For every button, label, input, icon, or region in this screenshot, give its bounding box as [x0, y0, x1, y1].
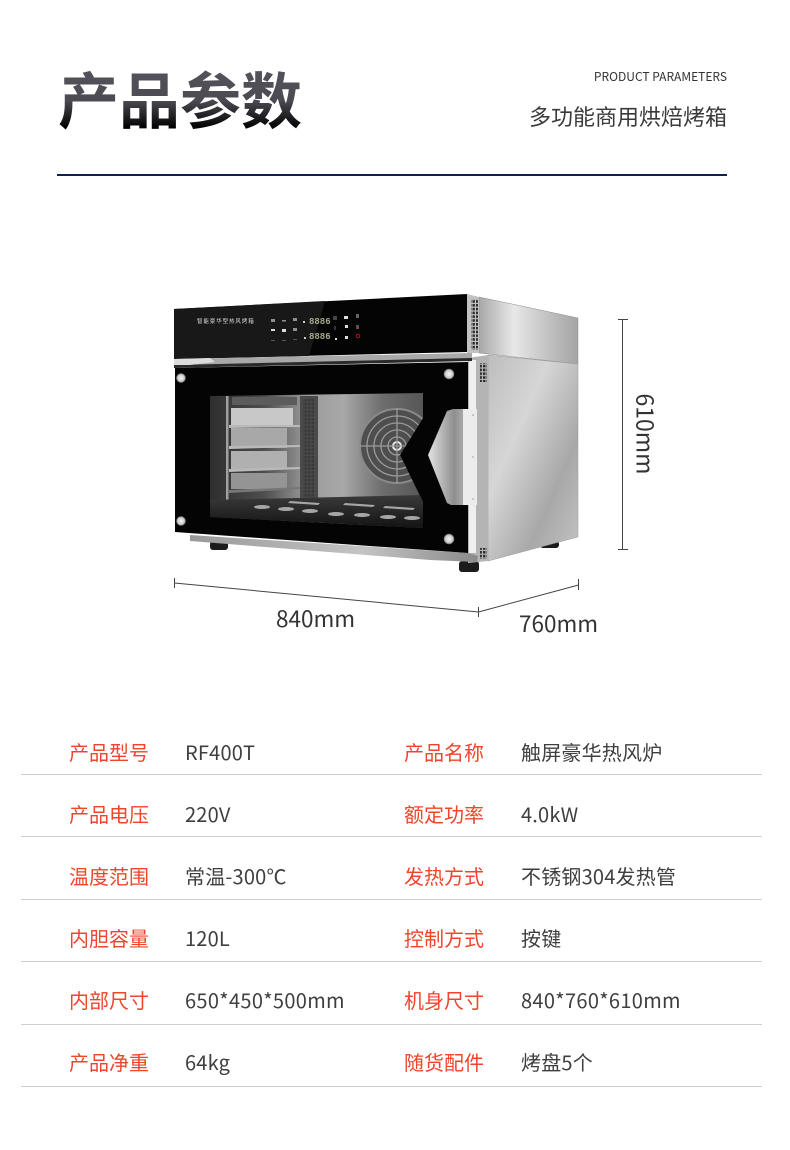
row: dimensions: 650*450*500mm — [185, 985, 345, 1014]
column vents — [480, 363, 487, 559]
row: capacity and control: 控制方式 — [404, 923, 484, 952]
subtitle: 多功能商用烘焙烤箱 — [529, 100, 727, 132]
row: temperature and heating: 发热方式 — [404, 861, 484, 890]
row: voltage and power: 4.0kW — [521, 799, 578, 828]
convection fan — [359, 408, 423, 484]
dimension: width — [174, 578, 478, 617]
row: voltage and power: 额定功率 — [404, 799, 484, 828]
row: voltage and power: 产品电压 — [69, 799, 149, 828]
row: capacity and control: 按键 — [521, 923, 561, 952]
door window — [210, 390, 435, 530]
row: voltage and power: 220V — [185, 799, 231, 828]
shelf back panels — [231, 397, 297, 489]
door handle — [428, 409, 477, 505]
row: model and name: 产品名称 — [404, 737, 484, 766]
row: weight and accessories — [69, 1047, 593, 1076]
chrome strip — [174, 353, 472, 366]
row: dimensions — [69, 985, 681, 1014]
row: model and name: RF400T — [185, 737, 255, 766]
dimension: height — [618, 319, 628, 550]
oven product illustration — [174, 294, 628, 617]
row: dimensions: 内部尺寸 — [69, 985, 149, 1014]
row: dimensions: 840*760*610mm — [521, 985, 681, 1014]
door glass — [175, 362, 468, 553]
row: voltage and power — [69, 799, 578, 828]
oven upper side panel — [479, 297, 578, 364]
touch icons — [271, 314, 359, 341]
header rule — [57, 174, 727, 176]
digital displays: 8886 — [309, 332, 331, 342]
label 760mm: 760mm — [519, 607, 598, 639]
front metal column — [468, 355, 488, 563]
row: dimensions: 机身尺寸 — [404, 985, 484, 1014]
row: temperature and heating — [69, 861, 676, 890]
row: capacity and control — [69, 923, 561, 952]
power button — [356, 334, 360, 338]
upper vent strip — [467, 294, 479, 353]
dimension: depth — [478, 579, 578, 612]
english subtitle: PRODUCT PARAMETERS — [594, 68, 727, 85]
oven floor with trays — [210, 495, 423, 530]
row: weight and accessories: 烤盘5个 — [521, 1047, 593, 1076]
perforated rack column — [300, 396, 318, 504]
digital displays — [309, 317, 331, 342]
feet — [210, 541, 559, 572]
row: temperature and heating: 温度范围 — [69, 861, 149, 890]
panel brand text: 智能豪华型热风烤箱 — [197, 317, 255, 325]
control panel — [174, 294, 467, 359]
row: weight and accessories: 64kg — [185, 1047, 230, 1076]
base tray — [190, 535, 478, 562]
row: temperature and heating: 常温-300℃ — [185, 861, 287, 890]
row: model and name: 产品型号 — [69, 737, 149, 766]
label 840mm: 840mm — [276, 602, 355, 634]
digital displays: 8886 — [309, 317, 331, 327]
row: weight and accessories: 随货配件 — [404, 1047, 484, 1076]
row: capacity and control: 内胆容量 — [69, 923, 149, 952]
row: model and name: 触屏豪华热风炉 — [521, 737, 662, 766]
parameter table — [21, 737, 762, 1087]
row: weight and accessories: 产品净重 — [69, 1047, 149, 1076]
door screws — [176, 369, 454, 544]
oven lower side panel — [488, 355, 578, 561]
row: temperature and heating: 不锈钢304发热管 — [521, 861, 676, 890]
row: model and name — [69, 737, 662, 766]
row: capacity and control: 120L — [185, 923, 230, 952]
label 610mm: 610mm — [630, 394, 664, 474]
title: 产品参数 — [58, 52, 302, 141]
rack rails — [226, 396, 300, 500]
